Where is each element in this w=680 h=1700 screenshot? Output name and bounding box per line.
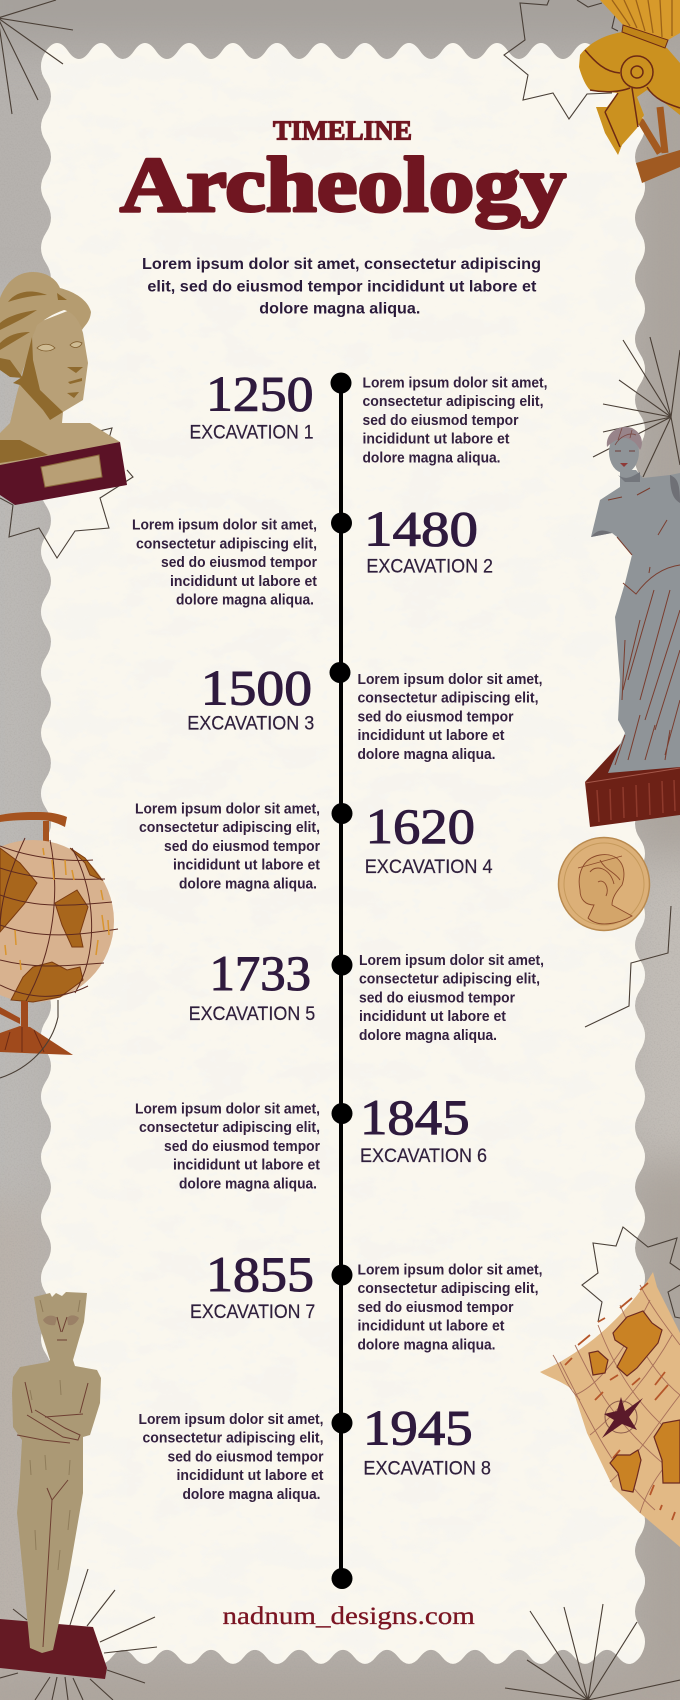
description 6 xyxy=(135,1102,320,1192)
intro paragraph: elit, sed do eiusmod tempor incididunt ut labore et xyxy=(147,278,537,296)
description 6: Lorem ipsum dolor sit amet, xyxy=(135,1102,320,1118)
entry: 1855 xyxy=(190,1246,542,1353)
description 5: sed do eiusmod tempor xyxy=(359,990,515,1006)
year 1945: 1945 xyxy=(363,1400,473,1456)
description 1: incididunt ut labore et xyxy=(362,432,510,448)
description 8: incididunt ut labore et xyxy=(176,1468,324,1484)
icon: squiggle outline right xyxy=(585,906,671,1027)
year 1500: 1500 xyxy=(201,660,312,716)
rays: right behind statue xyxy=(593,337,680,477)
description 6: incididunt ut labore et xyxy=(173,1158,320,1174)
icon: star outline behind map xyxy=(582,1227,680,1322)
year 1845: 1845 xyxy=(360,1089,470,1145)
rays: around statue base xyxy=(0,1569,157,1700)
label excavation 8: EXCAVATION 8 xyxy=(363,1458,491,1479)
description 6: dolore magna aliqua. xyxy=(179,1176,317,1192)
description 7: dolore magna aliqua. xyxy=(358,1337,496,1353)
label excavation 1: EXCAVATION 1 xyxy=(190,423,314,444)
description 2: incididunt ut labore et xyxy=(170,574,317,590)
footer website: nadnum_designs.com xyxy=(222,1603,475,1630)
rays: bottom right xyxy=(505,1604,680,1700)
description 8: Lorem ipsum dolor sit amet, xyxy=(138,1412,324,1428)
description 8 xyxy=(138,1412,324,1503)
description 3: dolore magna aliqua. xyxy=(358,747,496,763)
entry: 1733 xyxy=(189,945,544,1044)
icon: desk globe xyxy=(0,812,118,1078)
description 4: Lorem ipsum dolor sit amet, xyxy=(135,802,320,818)
description 1: consectetur adipiscing elit, xyxy=(362,394,544,410)
icon: stone bust on pedestal xyxy=(0,272,127,505)
entry: 1500 xyxy=(187,660,543,763)
description 1: Lorem ipsum dolor sit amet, xyxy=(362,376,548,392)
icon: grey Venus statue on base xyxy=(585,427,680,827)
title block xyxy=(120,114,566,318)
label excavation 4: EXCAVATION 4 xyxy=(365,857,493,878)
entry: 1845 xyxy=(135,1089,487,1192)
description 3: sed do eiusmod tempor xyxy=(358,709,514,725)
description 7: Lorem ipsum dolor sit amet, xyxy=(358,1262,542,1278)
intro paragraph: Lorem ipsum dolor sit amet, consectetur adipiscing xyxy=(142,256,541,273)
description 7: sed do eiusmod tempor xyxy=(358,1300,514,1316)
intro paragraph: dolore magna aliqua. xyxy=(259,300,420,318)
description 2: Lorem ipsum dolor sit amet, xyxy=(132,518,317,534)
description 7 xyxy=(358,1262,542,1353)
icon: treasure map xyxy=(540,1272,680,1547)
description 3: incididunt ut labore et xyxy=(358,728,505,744)
year 1480: 1480 xyxy=(364,501,478,557)
label excavation 5: EXCAVATION 5 xyxy=(189,1004,315,1025)
description 7: consectetur adipiscing elit, xyxy=(358,1281,538,1297)
description 5: Lorem ipsum dolor sit amet, xyxy=(359,953,544,969)
description 3: consectetur adipiscing elit, xyxy=(358,691,538,707)
description 8: dolore magna aliqua. xyxy=(182,1487,320,1503)
icon: gold coin xyxy=(558,838,650,930)
year 1855: 1855 xyxy=(206,1246,314,1302)
description 2: sed do eiusmod tempor xyxy=(161,555,317,571)
icon: wooden figure statue on base xyxy=(0,1292,107,1679)
description 1: dolore magna aliqua. xyxy=(362,450,500,466)
description 5 xyxy=(359,953,544,1044)
description 8: sed do eiusmod tempor xyxy=(168,1449,324,1465)
year 1733: 1733 xyxy=(210,945,311,1001)
entry: 1250 xyxy=(190,366,548,466)
description 5: incididunt ut labore et xyxy=(359,1009,506,1025)
entry: 1480 xyxy=(132,501,493,608)
description 6: consectetur adipiscing elit, xyxy=(139,1120,320,1136)
description 5: dolore magna aliqua. xyxy=(359,1028,497,1044)
description 3: Lorem ipsum dolor sit amet, xyxy=(358,672,542,688)
year 1250: 1250 xyxy=(206,366,314,422)
description 2 xyxy=(132,518,317,608)
description 4: sed do eiusmod tempor xyxy=(164,839,320,855)
description 2: dolore magna aliqua. xyxy=(176,592,314,608)
entry: 1945 xyxy=(138,1400,491,1503)
description 4 xyxy=(135,802,320,892)
label excavation 3: EXCAVATION 3 xyxy=(187,713,314,734)
description 2: consectetur adipiscing elit, xyxy=(136,536,317,552)
rays: top left xyxy=(0,0,73,114)
icon: star outline behind bust xyxy=(0,428,133,558)
label excavation 6: EXCAVATION 6 xyxy=(360,1146,487,1167)
timeline axis with dots xyxy=(330,372,352,1589)
description 3 xyxy=(358,672,542,763)
label excavation 2: EXCAVATION 2 xyxy=(366,556,493,578)
intro paragraph xyxy=(142,256,541,318)
heading: TIMELINE: TIMELINE xyxy=(273,114,412,145)
description 8: consectetur adipiscing elit, xyxy=(142,1431,324,1447)
description 1 xyxy=(362,376,548,466)
description 6: sed do eiusmod tempor xyxy=(164,1139,320,1155)
label excavation 7: EXCAVATION 7 xyxy=(190,1302,315,1323)
description 4: dolore magna aliqua. xyxy=(179,876,317,892)
year 1620: 1620 xyxy=(366,798,475,854)
heading: Archeology: Archeology xyxy=(120,141,566,228)
description 4: consectetur adipiscing elit, xyxy=(139,820,320,836)
icon: gold helmet on stand xyxy=(579,0,680,183)
entry: 1620 xyxy=(135,798,493,892)
description 5: consectetur adipiscing elit, xyxy=(359,972,540,988)
description 7: incididunt ut labore et xyxy=(358,1319,505,1335)
icon: star outline behind helmet xyxy=(504,0,618,119)
description 4: incididunt ut labore et xyxy=(173,858,320,874)
description 1: sed do eiusmod tempor xyxy=(362,413,519,429)
